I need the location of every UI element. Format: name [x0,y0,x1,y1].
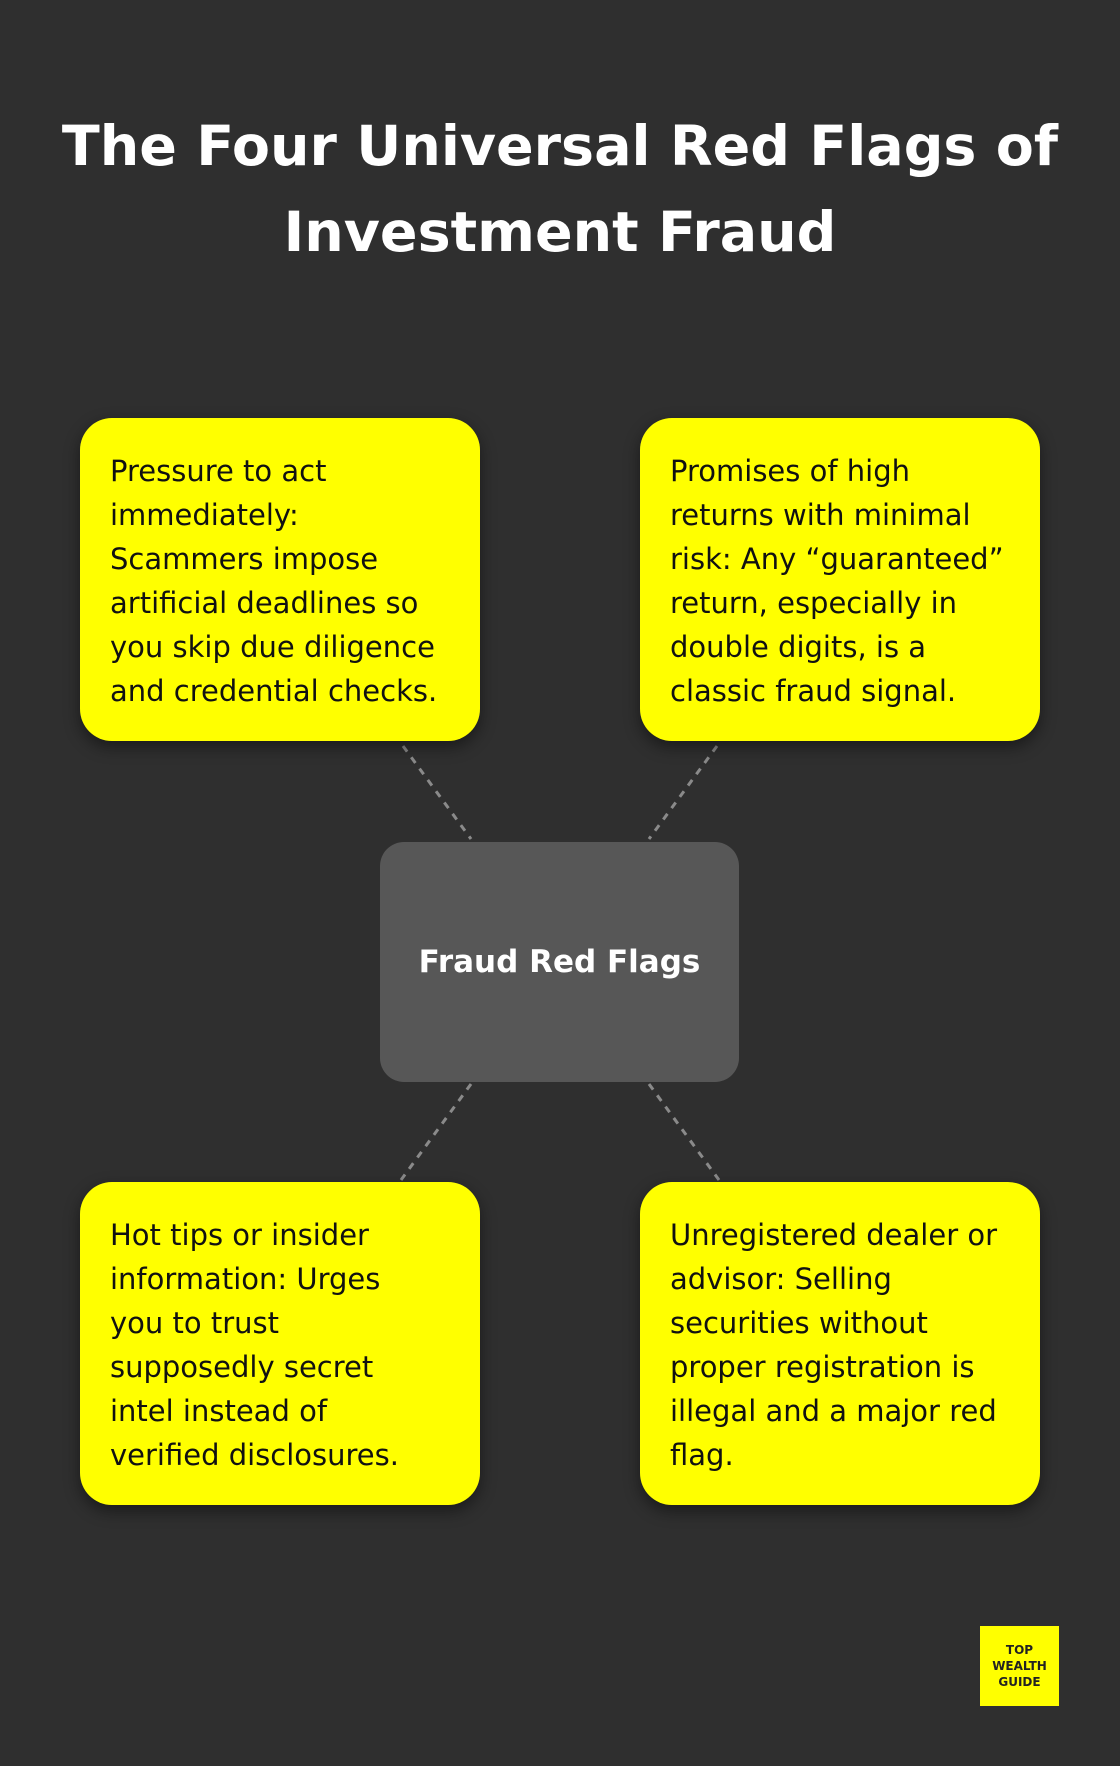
panel: pressure: artificial deadlines so [110,586,418,620]
panel: pressure: Pressure to act [110,454,326,488]
panel: hot tips [80,1182,480,1505]
panel: hot tips: you to trust [110,1306,279,1340]
center node: Fraud Red Flags [419,944,700,980]
panel: high returns: return, especially in [670,586,957,620]
panel: high returns: returns with minimal [670,498,971,532]
panel: unregistered: illegal and a major red [670,1394,997,1428]
logo: TOP [1006,1643,1033,1657]
panel: high returns: double digits, is a [670,630,926,664]
panel: pressure: you skip due diligence [110,630,435,664]
panel: hot tips: Hot tips or insider [110,1218,369,1252]
panel: hot tips: intel instead of [110,1394,327,1428]
panel: pressure: Scammers impose [110,542,378,576]
panel: unregistered: Unregistered dealer or [670,1218,997,1252]
panel: unregistered: securities without [670,1306,928,1340]
logo: WEALTH [992,1659,1047,1673]
panel: high returns [640,418,1040,741]
panel: pressure: and credential checks. [110,674,437,708]
logo: GUIDE [998,1675,1041,1689]
panel: hot tips: verified disclosures. [110,1438,399,1472]
panel: hot tips: supposedly secret [110,1350,373,1384]
panel: unregistered [640,1182,1040,1505]
panel: unregistered: proper registration is [670,1350,975,1384]
panel: unregistered: flag. [670,1438,734,1472]
panel: hot tips: information: Urges [110,1262,380,1296]
center node [380,842,739,1082]
title [62,114,1058,265]
panel: high returns: classic fraud signal. [670,674,956,708]
panel: pressure: immediately: [110,498,299,532]
logo [980,1626,1059,1706]
panel: high returns: Promises of high [670,454,910,488]
panel: unregistered: advisor: Selling [670,1262,892,1296]
title: Investment Fraud [284,200,836,265]
panel: pressure [80,418,480,741]
title: The Four Universal Red Flags of [62,114,1058,179]
panel: high returns: risk: Any “guaranteed” [670,542,1004,576]
